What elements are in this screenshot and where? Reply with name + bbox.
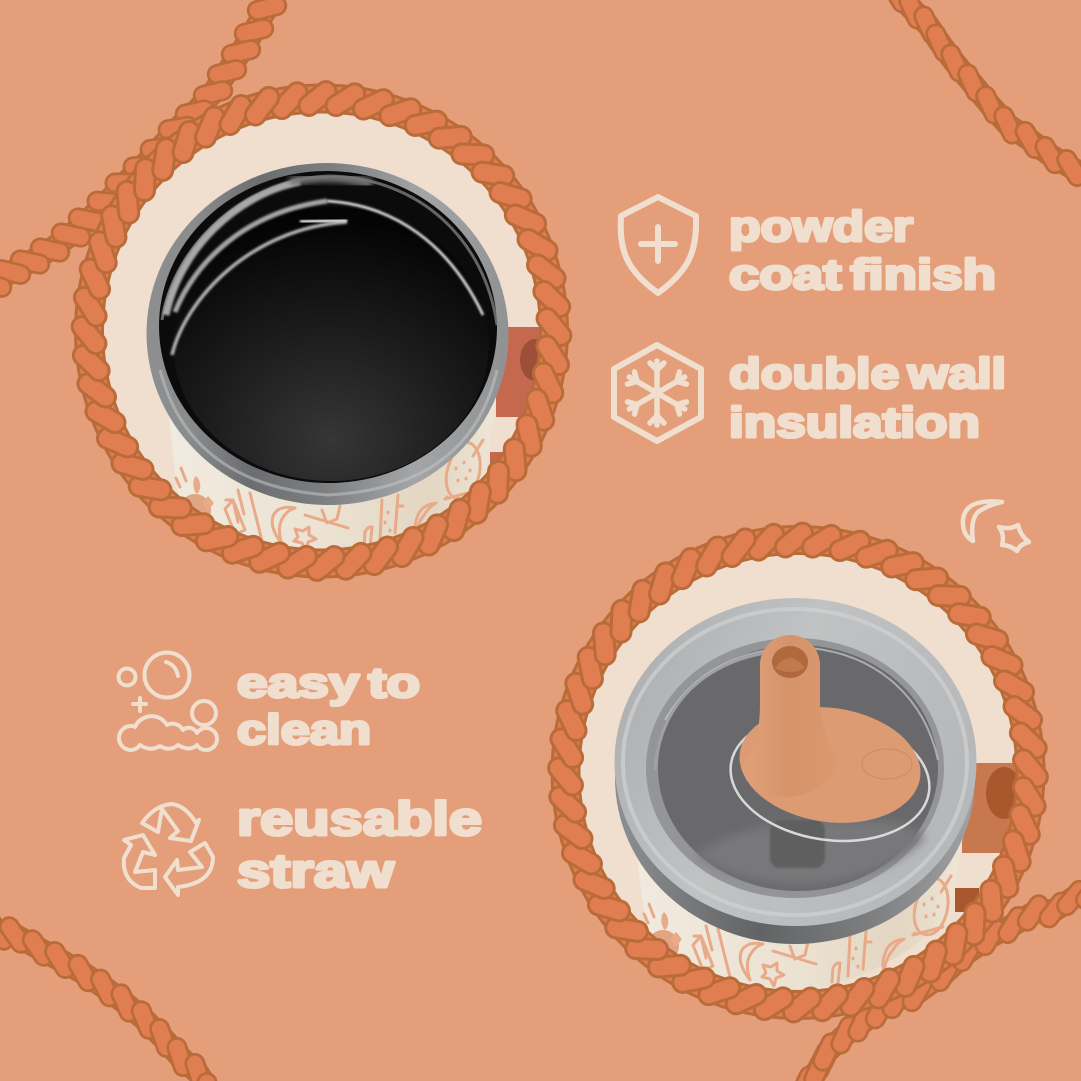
icon: snowflake in hexagon xyxy=(614,345,701,441)
icon: bubbles and foam xyxy=(118,652,217,750)
icon: shield xyxy=(621,197,696,293)
text: reusable straw: reusable xyxy=(237,792,482,845)
feature: reusable straw xyxy=(124,792,482,897)
clear lid xyxy=(614,598,976,944)
text: easy to clean: easy to xyxy=(237,659,420,706)
rope: bottom right strand xyxy=(801,884,1081,1081)
steel rim and dark interior xyxy=(141,157,514,511)
mug body with desert pattern xyxy=(633,830,964,990)
icon: recycle arrows xyxy=(124,804,213,895)
text: double wall insulation: insulation xyxy=(729,399,980,447)
silicone straw and tab xyxy=(732,635,928,834)
text: powder coat finish: powder xyxy=(729,203,913,251)
rope ring xyxy=(559,533,1037,1012)
rope: top right strand xyxy=(892,0,1081,178)
feature: double wall insulation xyxy=(614,345,1006,447)
cream circle backdrop xyxy=(96,105,548,557)
text: easy to clean: clean xyxy=(237,706,371,753)
text: reusable straw: straw xyxy=(237,844,395,897)
text: powder coat finish: coat finish xyxy=(729,251,996,299)
text: double wall insulation xyxy=(729,350,1006,447)
panel: mug interior in rope circle xyxy=(82,92,561,570)
text: easy to clean xyxy=(237,659,420,753)
mug handle xyxy=(955,763,1022,912)
rope: bottom left strand xyxy=(0,924,213,1081)
icon: moon and star xyxy=(963,501,1029,551)
mug body with desert pattern xyxy=(169,396,496,546)
rope ring xyxy=(82,92,561,570)
rope: top left strand xyxy=(0,6,277,287)
text: reusable straw xyxy=(237,792,482,897)
feature: easy to clean xyxy=(118,652,420,753)
feature: powder coat finish xyxy=(621,197,996,299)
mug handle xyxy=(490,327,550,469)
text: double wall insulation: double wall xyxy=(729,350,1006,398)
cream circle backdrop xyxy=(572,547,1024,999)
panel: mug with lid and straw in rope circle xyxy=(559,533,1037,1012)
text: powder coat finish xyxy=(729,203,996,299)
